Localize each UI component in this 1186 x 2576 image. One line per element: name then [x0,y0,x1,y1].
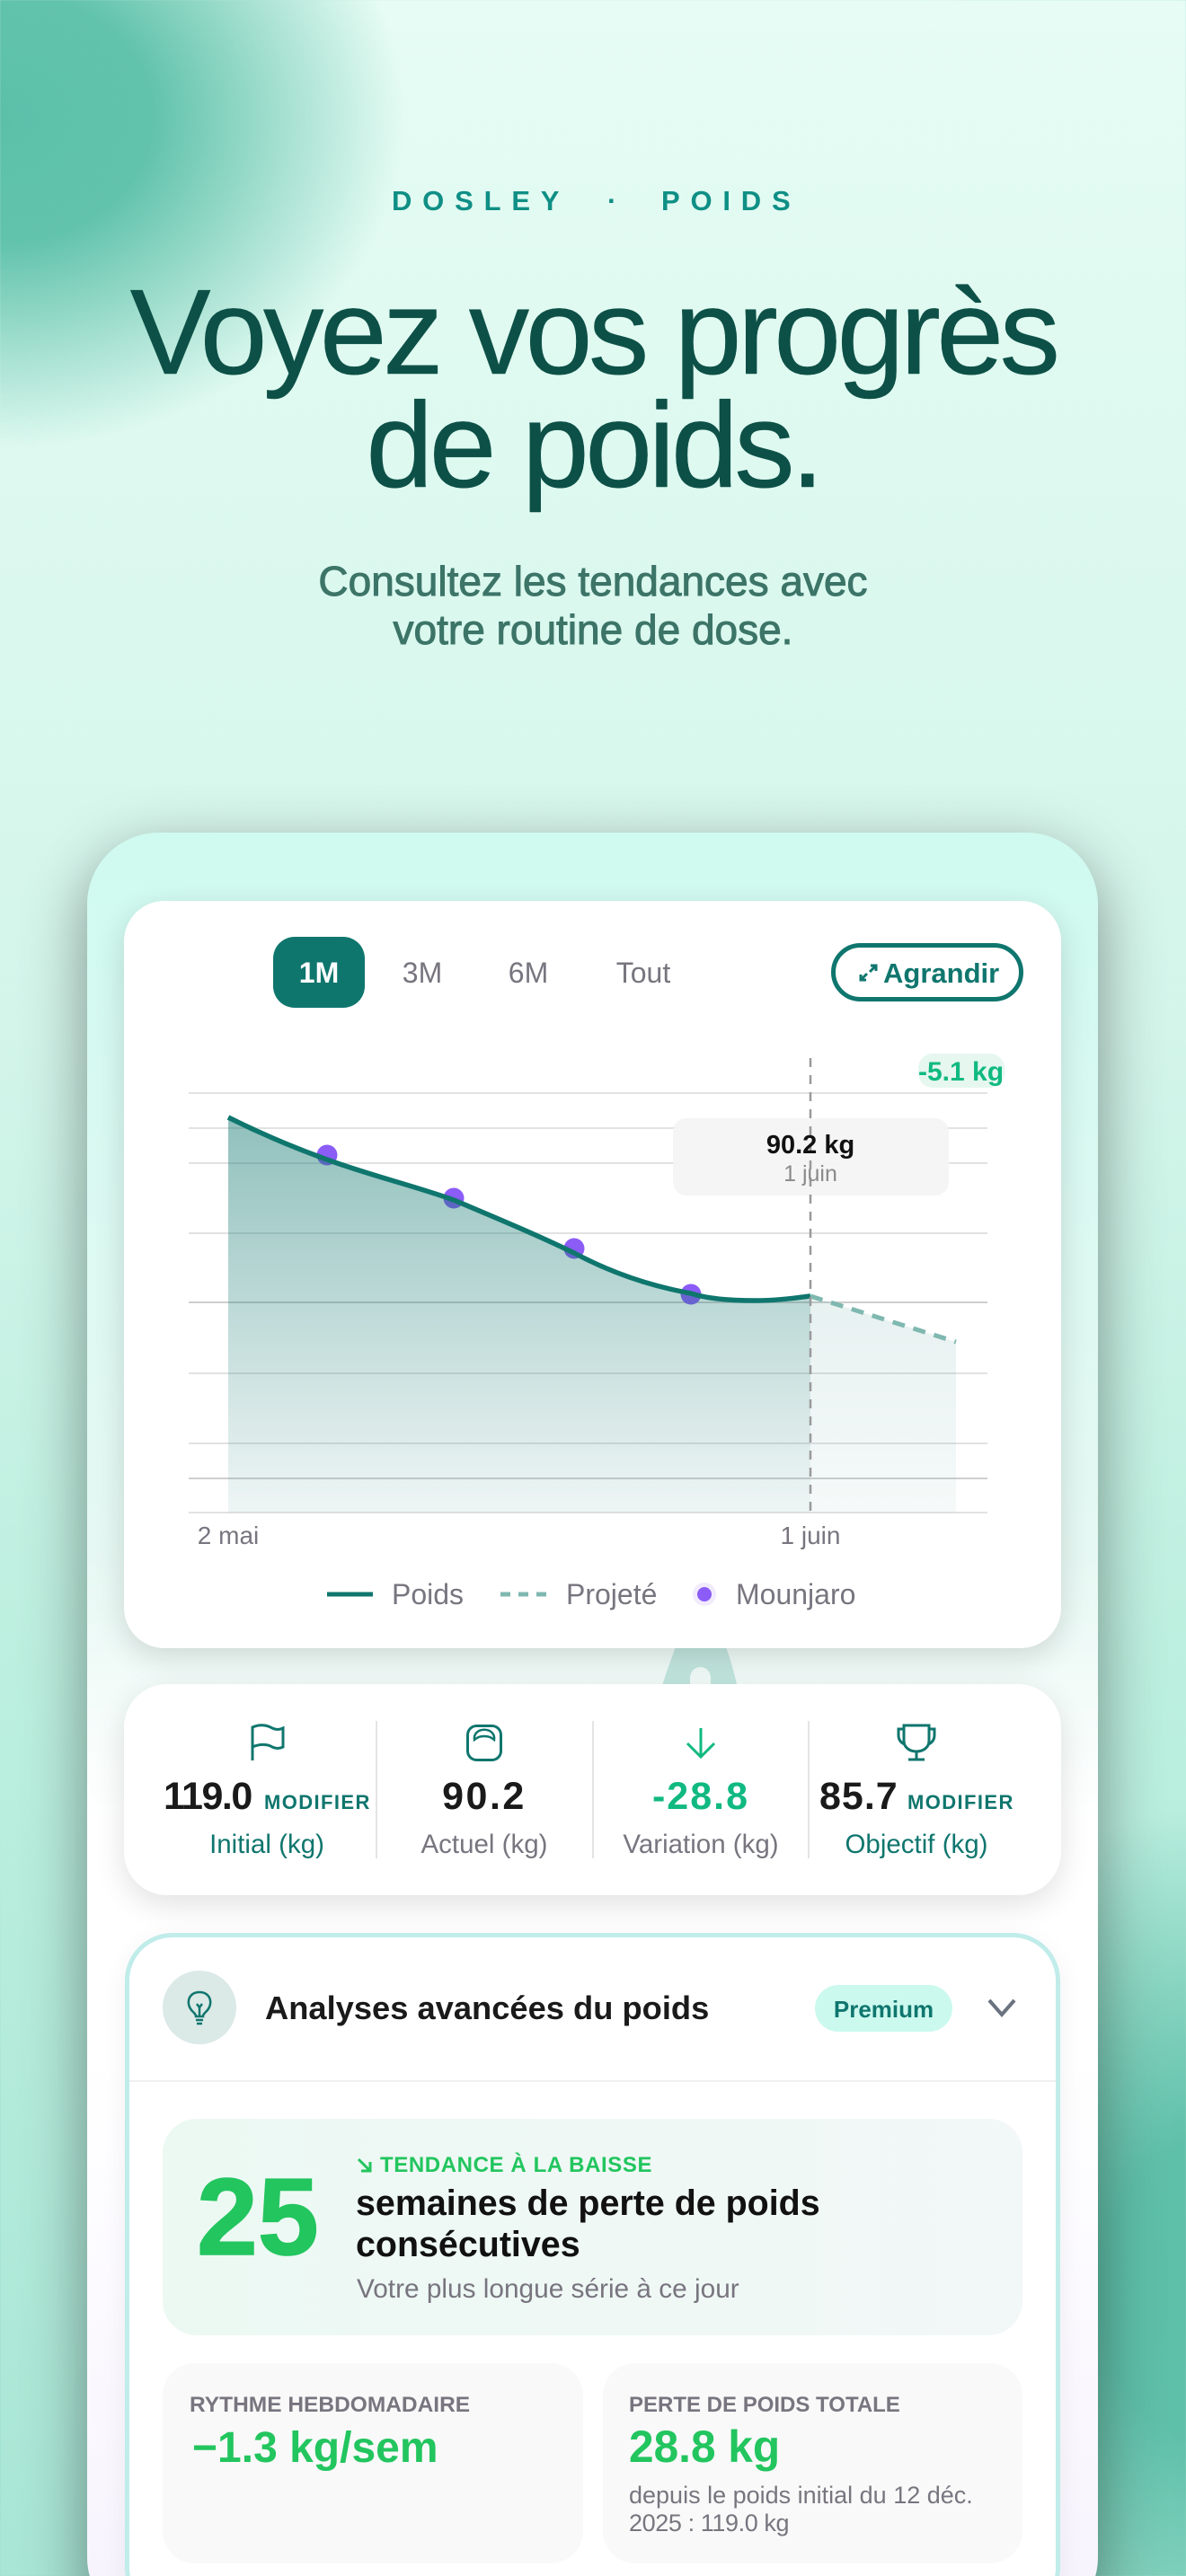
streak panel [163,2119,1022,2335]
weekly pace card: RYTHME HEBDOMADAIRE [190,2393,470,2417]
stat: initial: MODIFIER [264,1791,371,1813]
subtitle: votre routine de dose. [394,606,792,653]
weekly pace card: −1.3 kg/sem [192,2424,438,2472]
stat: initial [164,1725,371,1859]
medication markers [316,1144,701,1304]
legend: Mounjaro [736,1578,855,1610]
stat: change: -28.8 [652,1775,749,1818]
change badge: -5.1 kg [918,1057,1004,1087]
stat: initial: Initial (kg) [209,1830,324,1859]
stat: initial: 119.0 [164,1775,252,1818]
premium badge: Premium [834,1996,934,2023]
weight area [228,1117,810,1513]
weight line [228,1117,810,1301]
title [130,264,1057,513]
stat: goal: 85.7 [819,1775,898,1818]
legend [327,1578,855,1610]
eyebrow: brand label: DOSLEY [392,185,570,216]
total loss card: 2025 : 119.0 kg [629,2510,789,2536]
stat: change: Variation (kg) [623,1830,779,1859]
title: Voyez vos progrès [130,264,1056,400]
subtitle: Consultez les tendances avec [318,558,868,604]
total loss card: depuis le poids initial du 12 déc. [629,2482,973,2509]
stat columns [164,1721,1014,1859]
eyebrow: brand label: · [607,185,616,216]
stat: goal [819,1725,1014,1859]
expand button: Agrandir [883,957,999,989]
streak panel: semaines de perte de poids [356,2183,820,2223]
total loss card [603,2363,1022,2563]
premium badge [815,1985,952,2032]
legend: Projeté [566,1578,657,1610]
range tabs [273,937,670,1008]
streak panel: consécutives [356,2225,580,2264]
chart and controls [189,937,1023,1610]
x axis labels [198,1522,840,1549]
icon: light bulb [163,1971,236,2044]
tooltip text: 1 juin [783,1161,837,1187]
projected area [810,1296,956,1513]
title: de poids. [366,377,820,513]
stat: goal: Objectif (kg) [845,1830,988,1859]
streak panel: Votre plus longue série à ce jour [357,2274,739,2304]
projected line [810,1296,956,1342]
tooltip box [673,1118,949,1195]
total loss card: 28.8 kg [629,2422,780,2472]
range tabs: Tout [616,957,670,989]
panel: advanced weight insights [125,1933,1060,2576]
panel: weight stats [124,1684,1061,1895]
tooltip text: 90.2 kg [766,1131,854,1160]
stat: current: Actuel (kg) [420,1830,548,1859]
insights content [129,1971,1056,2536]
section heading: Analyses avancées du poids [265,1989,709,2026]
phone mockup [87,833,1098,2576]
icon: chevron [989,2000,1014,2015]
x axis labels: 2 mai [198,1522,259,1549]
stat: current [420,1726,548,1859]
x axis labels: 1 juin [781,1522,840,1549]
stat: change [623,1728,779,1859]
legend: Poids [392,1578,464,1610]
selected date marker [810,1058,811,1513]
streak panel: TENDANCE À LA BAISSE [380,2152,652,2177]
range tabs: 6M [509,957,548,989]
panel: weight chart card [124,901,1061,1648]
stat: current: 90.2 [442,1775,527,1818]
stat: goal: MODIFIER [907,1791,1014,1813]
streak panel: 25 [197,2156,319,2278]
weekly pace card [163,2363,583,2563]
eyebrow: brand label: POIDS [661,185,801,216]
subtitle [318,558,868,653]
expand button [834,945,1021,999]
total loss card: PERTE DE POIDS TOTALE [629,2393,900,2417]
eyebrow: brand label [392,185,801,216]
range tabs: 3M [403,957,442,989]
range tabs: 1M [299,957,339,989]
tooltip text [766,1131,854,1187]
